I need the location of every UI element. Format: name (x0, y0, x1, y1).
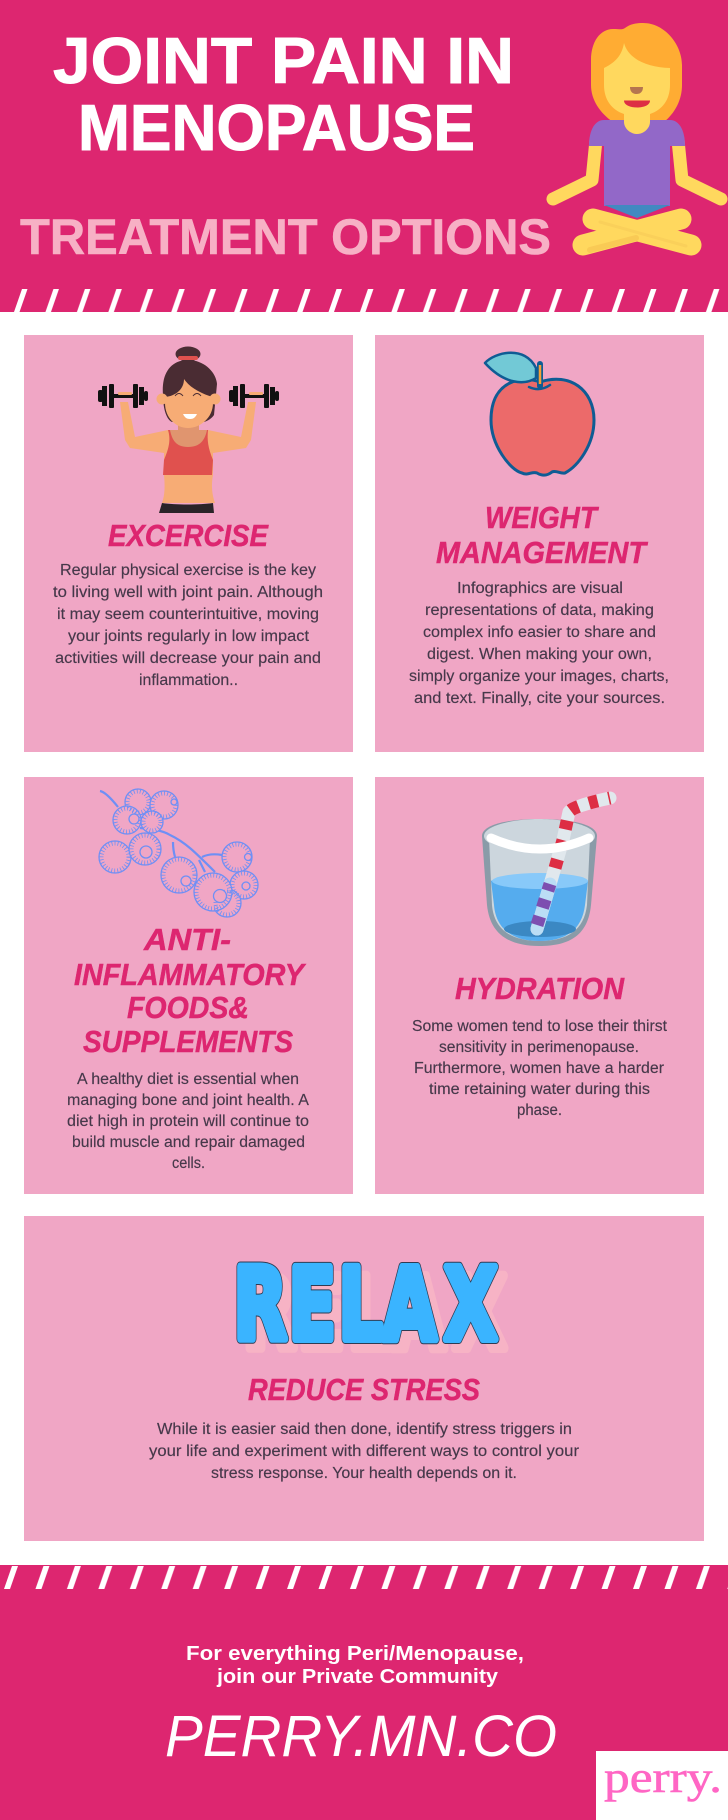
panel: exercise (24, 335, 353, 752)
relax wordmark: RELAX (234, 1249, 497, 1363)
heading: anti-inflammatory foods & supplements: ANTI- (143, 922, 231, 957)
header band (0, 0, 728, 312)
body text: representations of data, making (425, 602, 654, 619)
body text: build muscle and repair damaged (72, 1134, 305, 1151)
panel: relax (24, 1216, 704, 1541)
panel: weight management (375, 335, 704, 752)
heading: hydration: HYDRATION (455, 971, 625, 1006)
icon: meditating woman (553, 23, 721, 250)
icon: glass of water with straw (482, 798, 610, 946)
body text: your life and experiment with different ways to control your (149, 1443, 579, 1460)
body text: diet high in protein will continue to (67, 1113, 309, 1130)
body text: A healthy diet is essential when (77, 1071, 299, 1088)
relax wordmark: RELAX (234, 1249, 497, 1363)
heading: anti-inflammatory foods & supplements: FOODS& (127, 990, 249, 1025)
heading: anti-inflammatory foods & supplements: SUPPLEMENTS (83, 1024, 293, 1059)
heading: anti-inflammatory foods & supplements (74, 922, 307, 1059)
body text (67, 1071, 310, 1172)
heading: weight management: MANAGEMENT (436, 535, 649, 570)
body text (409, 580, 669, 707)
website url: PERRY.MN.CO (165, 1704, 557, 1769)
body text: phase. (517, 1102, 562, 1119)
body text: Regular physical exercise is the key (60, 562, 316, 579)
body text: Some women tend to lose their thirst (412, 1018, 668, 1035)
footer band (0, 1565, 728, 1820)
logo: perry (596, 1751, 728, 1820)
icon: blueberries (99, 789, 258, 917)
body text: activities will decrease your pain and (55, 650, 321, 667)
body text: Furthermore, women have a harder (414, 1060, 664, 1077)
body text: complex info easier to share and (423, 624, 656, 641)
body text: time retaining water during this (429, 1081, 650, 1098)
logo: perry: perry. (604, 1753, 722, 1802)
body text: managing bone and joint health. A (67, 1092, 310, 1109)
body text: your joints regularly in low impact (68, 628, 310, 645)
body text: While it is easier said then done, identify stress triggers in (157, 1421, 572, 1438)
title: MENOPAUSE (78, 91, 475, 164)
subtitle: TREATMENT OPTIONS (20, 209, 551, 265)
title: JOINT PAIN IN (53, 24, 514, 97)
body text: to living well with joint pain. Although (53, 584, 323, 601)
body text: cells. (172, 1155, 205, 1172)
body text: sensitivity in perimenopause. (439, 1039, 639, 1056)
heading: anti-inflammatory foods & supplements: INFLAMMATORY (74, 957, 307, 992)
body text: it may seem counterintuitive, moving (57, 606, 319, 623)
panel: anti-inflammatory foods (24, 777, 353, 1194)
heading: weight management: WEIGHT (485, 500, 600, 535)
heading: excercise: EXCERCISE (108, 518, 269, 553)
call to action text: For everything Peri/Menopause, (186, 1643, 524, 1665)
body text: stress response. Your health depends on it. (211, 1465, 517, 1482)
body text (412, 1018, 668, 1119)
body text: digest. When making your own, (427, 646, 652, 663)
panel: hydration (375, 777, 704, 1194)
call to action text: join our Private Community (216, 1666, 499, 1688)
body text: simply organize your images, charts, (409, 668, 669, 685)
title (53, 24, 514, 164)
heading: weight management (436, 500, 649, 570)
body text (149, 1421, 579, 1482)
icon: woman lifting dumbbells (98, 346, 279, 513)
body text: inflammation.. (139, 672, 238, 689)
body text (53, 562, 323, 689)
call to action text (186, 1643, 524, 1688)
body text: and text. Finally, cite your sources. (414, 690, 665, 707)
heading: reduce stress: REDUCE STRESS (248, 1372, 480, 1407)
icon: apple (485, 353, 594, 475)
body text: Infographics are visual (457, 580, 623, 597)
relax wordmark: RELAX (243, 1258, 506, 1372)
